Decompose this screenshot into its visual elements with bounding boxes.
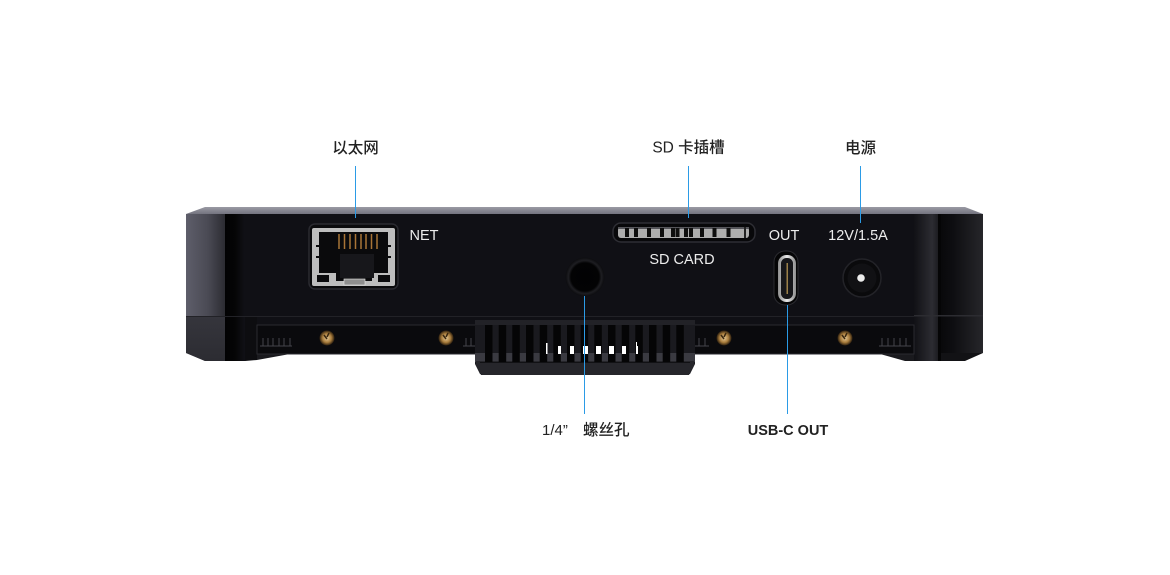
light showing through slots [546, 342, 638, 354]
icon: SD card slot [613, 223, 755, 242]
icon: power jack [843, 259, 881, 297]
heading: 1/4 inch screw hole: 1/4” [542, 422, 568, 439]
vent ticks [260, 338, 292, 346]
label: SD CARD: SD CARD [649, 252, 715, 268]
icon: ethernet port [309, 224, 398, 289]
heading: ethernet [332, 139, 379, 218]
lower recessed panel [257, 325, 914, 354]
leader line: ethernet [355, 166, 356, 218]
device body [186, 207, 983, 361]
heading: power: 电源 [845, 139, 876, 157]
heading: SD card slot: SD 卡插槽 [652, 138, 725, 156]
heading: USB-C out [748, 305, 828, 439]
heading: power [845, 139, 876, 223]
heading: SD card slot [652, 138, 725, 218]
icon: screws [320, 330, 852, 346]
heat sink [475, 320, 695, 375]
heading: 1/4 inch screw hole: 螺丝孔 [583, 421, 630, 439]
right side block [914, 214, 983, 361]
main face [226, 214, 914, 326]
icon: 1/4 inch screw hole [566, 258, 604, 296]
top bevel [186, 207, 983, 214]
label: 12V/1.5A: 12V/1.5A [828, 228, 888, 244]
label: NET: NET [410, 228, 439, 244]
heading: USB-C out: USB-C OUT [748, 423, 828, 439]
icon: USB-C port [774, 251, 798, 305]
leader line: power [860, 166, 861, 223]
heading: ethernet: 以太网 [332, 139, 379, 157]
fin slots [485, 325, 684, 362]
lower left and right seams [186, 316, 914, 317]
leader line: screw hole [584, 296, 585, 414]
left side block [186, 214, 226, 361]
label: OUT: OUT [769, 228, 799, 244]
leader line: SD card slot [688, 166, 689, 218]
heading: 1/4 inch screw hole [542, 296, 630, 439]
leader line: USB-C [787, 305, 788, 414]
